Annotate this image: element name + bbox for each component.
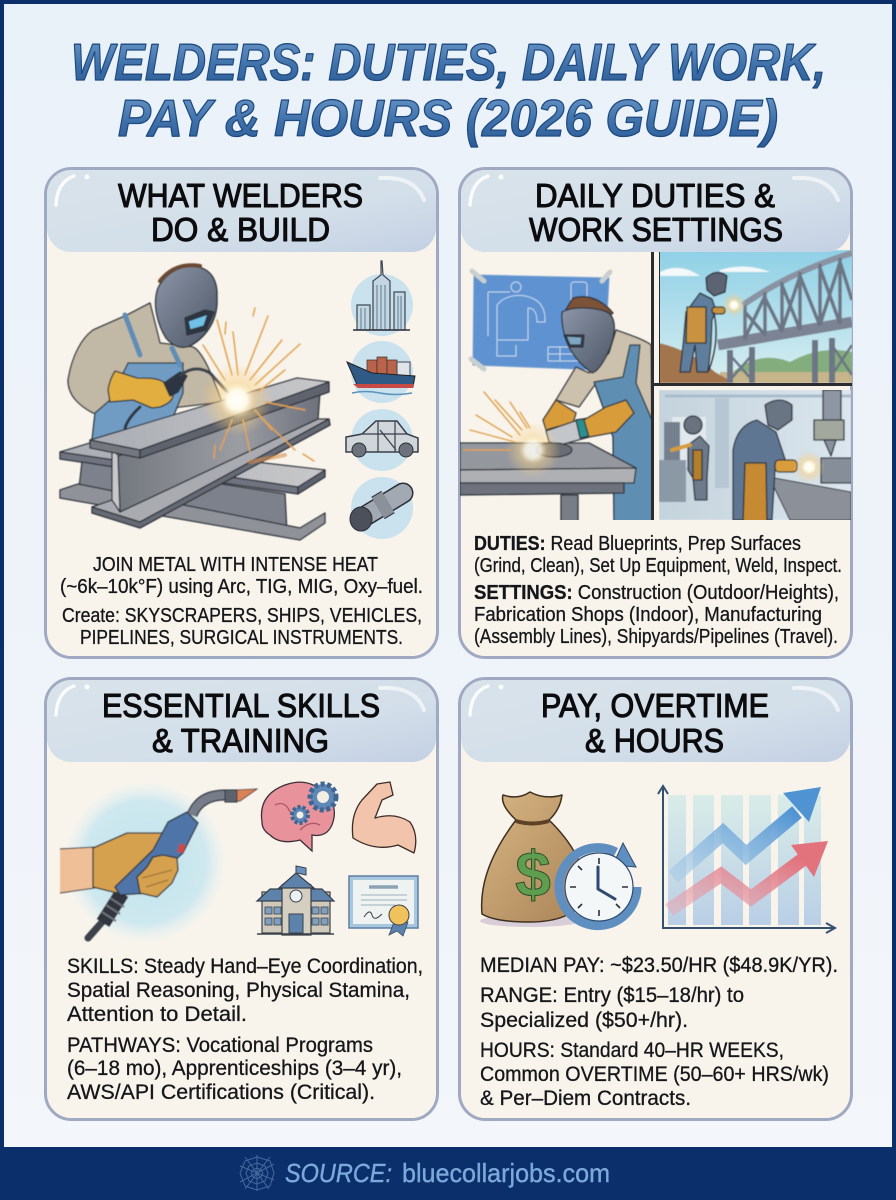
panel: what welders do and build: [46, 168, 438, 658]
panel: daily duties and work settings: [460, 168, 852, 658]
chart: rising pay lines: [658, 786, 835, 933]
scene: indoor fabrication shop: [659, 390, 852, 522]
heading: what welders do and build: [47, 170, 436, 252]
bench: [769, 477, 851, 520]
grinding sparks: [464, 392, 561, 478]
text: skills and pathways: Attention to Detail.: [67, 1003, 247, 1026]
text: pay, range and hours: Specialized ($50+/hr).: [480, 1009, 688, 1032]
bridge truss: [718, 253, 852, 383]
front steel beam: [90, 378, 330, 528]
text: what welders do: Create: SKYSCRAPERS, SHIPS, VEHICLES,: [62, 605, 422, 627]
illustration: welder joining steel beams: [60, 265, 330, 540]
title: PAY & HOURS (2026 GUIDE): [118, 90, 778, 148]
text: skills and pathways: AWS/API Certifications (Critical).: [67, 1081, 375, 1104]
text: skills and pathways: SKILLS: Steady Hand–Eye Coordination,: [67, 955, 423, 978]
heading: essential skills and training: ESSENTIAL SKILLS: [102, 687, 380, 724]
icon: brain with gears: [261, 782, 336, 851]
heading: essential skills and training: [47, 680, 436, 762]
scene: grinding at a workbench: [460, 271, 652, 522]
text: what welders do: PIPELINES, SURGICAL INSTRUMENTS.: [80, 627, 403, 649]
heading: essential skills and training: & TRAINING: [152, 722, 329, 759]
heading: pay, overtime and hours: & HOURS: [585, 722, 724, 759]
welder figure: [68, 265, 231, 440]
text: what welders do: (~6k–10k°F) using Arc, TIG, MIG, Oxy–fuel.: [60, 576, 423, 598]
welding sparks: [201, 308, 314, 462]
text: duties and settings: (Assembly Lines), Shipyards/Pipelines (Travel).: [474, 626, 838, 648]
icon: money bag: [480, 792, 586, 927]
icon: car frame: [346, 409, 418, 471]
grinding welder: [543, 297, 652, 522]
heading: what welders do and build: DO & BUILD: [151, 211, 330, 248]
icon: certificate: [349, 876, 418, 936]
foreground worker: [733, 400, 797, 522]
heading: pay, overtime and hours: [461, 680, 850, 762]
text: pay, range and hours: & Per–Diem Contracts.: [480, 1087, 691, 1110]
icon: money bag: $: [515, 838, 551, 910]
icon: clock with arrow: [559, 843, 637, 926]
text: pay, range and hours: HOURS: Standard 40–HR WEEKS,: [480, 1039, 784, 1062]
bridge welder: [680, 272, 727, 372]
illustration: gloved hand holding welding torch: [60, 780, 257, 944]
text: duties and settings: [474, 533, 842, 648]
title: [71, 34, 826, 148]
angle grinder: [536, 400, 634, 457]
text: duties and settings: Fabrication Shops (Indoor), Manufacturing: [474, 604, 822, 626]
icon: pipe: [350, 477, 413, 539]
heading: daily duties and work settings: WORK SETTINGS: [529, 211, 783, 248]
text: pay, range and hours: Common OVERTIME (50–60+ HRS/wk): [480, 1063, 829, 1086]
text: what welders do: [60, 554, 423, 649]
footer source band: [0, 1147, 896, 1200]
heading: daily duties and work settings: DAILY DUTIES &: [535, 177, 775, 214]
background worker: [672, 416, 709, 500]
text: skills and pathways: [67, 955, 423, 1104]
rear steel beam: [60, 443, 325, 540]
text: what welders do: JOIN METAL WITH INTENSE HEAT: [93, 554, 378, 576]
icon: school building: [257, 866, 334, 935]
text: skills and pathways: (6–18 mo), Apprenticeships (3–4 yr),: [67, 1057, 402, 1080]
text: duties and settings: SETTINGS: Construction (Outdoor/Heights),: [474, 582, 839, 604]
source text: SOURCE:: [285, 1158, 392, 1188]
source text: bluecollarjobs.com: [402, 1158, 610, 1188]
heading: pay, overtime and hours: PAY, OVERTIME: [541, 687, 769, 724]
icon: flexed arm: [352, 782, 416, 853]
icon: spider web: [240, 1155, 274, 1191]
machine: [814, 390, 852, 483]
text: pay, range and hours: RANGE: Entry ($15–18/hr) to: [480, 984, 744, 1007]
text: pay, range and hours: MEDIAN PAY: ~$23.50/HR ($48.9K/YR).: [480, 954, 838, 977]
scene: outdoor bridge construction: [659, 250, 852, 383]
bench: [460, 443, 636, 522]
panel: essential skills and training: [46, 678, 438, 1120]
panel: pay, overtime and hours: [460, 678, 852, 1120]
icon: ship: [347, 341, 415, 403]
text: duties and settings: DUTIES: Read Blueprints, Prep Surfaces: [474, 533, 801, 555]
text: skills and pathways: PATHWAYS: Vocational Programs: [67, 1034, 373, 1057]
heading: what welders do and build: WHAT WELDERS: [118, 177, 363, 214]
text: skills and pathways: Spatial Reasoning, Physical Stamina,: [67, 979, 410, 1002]
text: pay, range and hours: [480, 954, 838, 1110]
icon: skyscrapers: [351, 261, 413, 336]
blueprint: [471, 271, 610, 370]
heading: daily duties and work settings: [461, 170, 850, 252]
